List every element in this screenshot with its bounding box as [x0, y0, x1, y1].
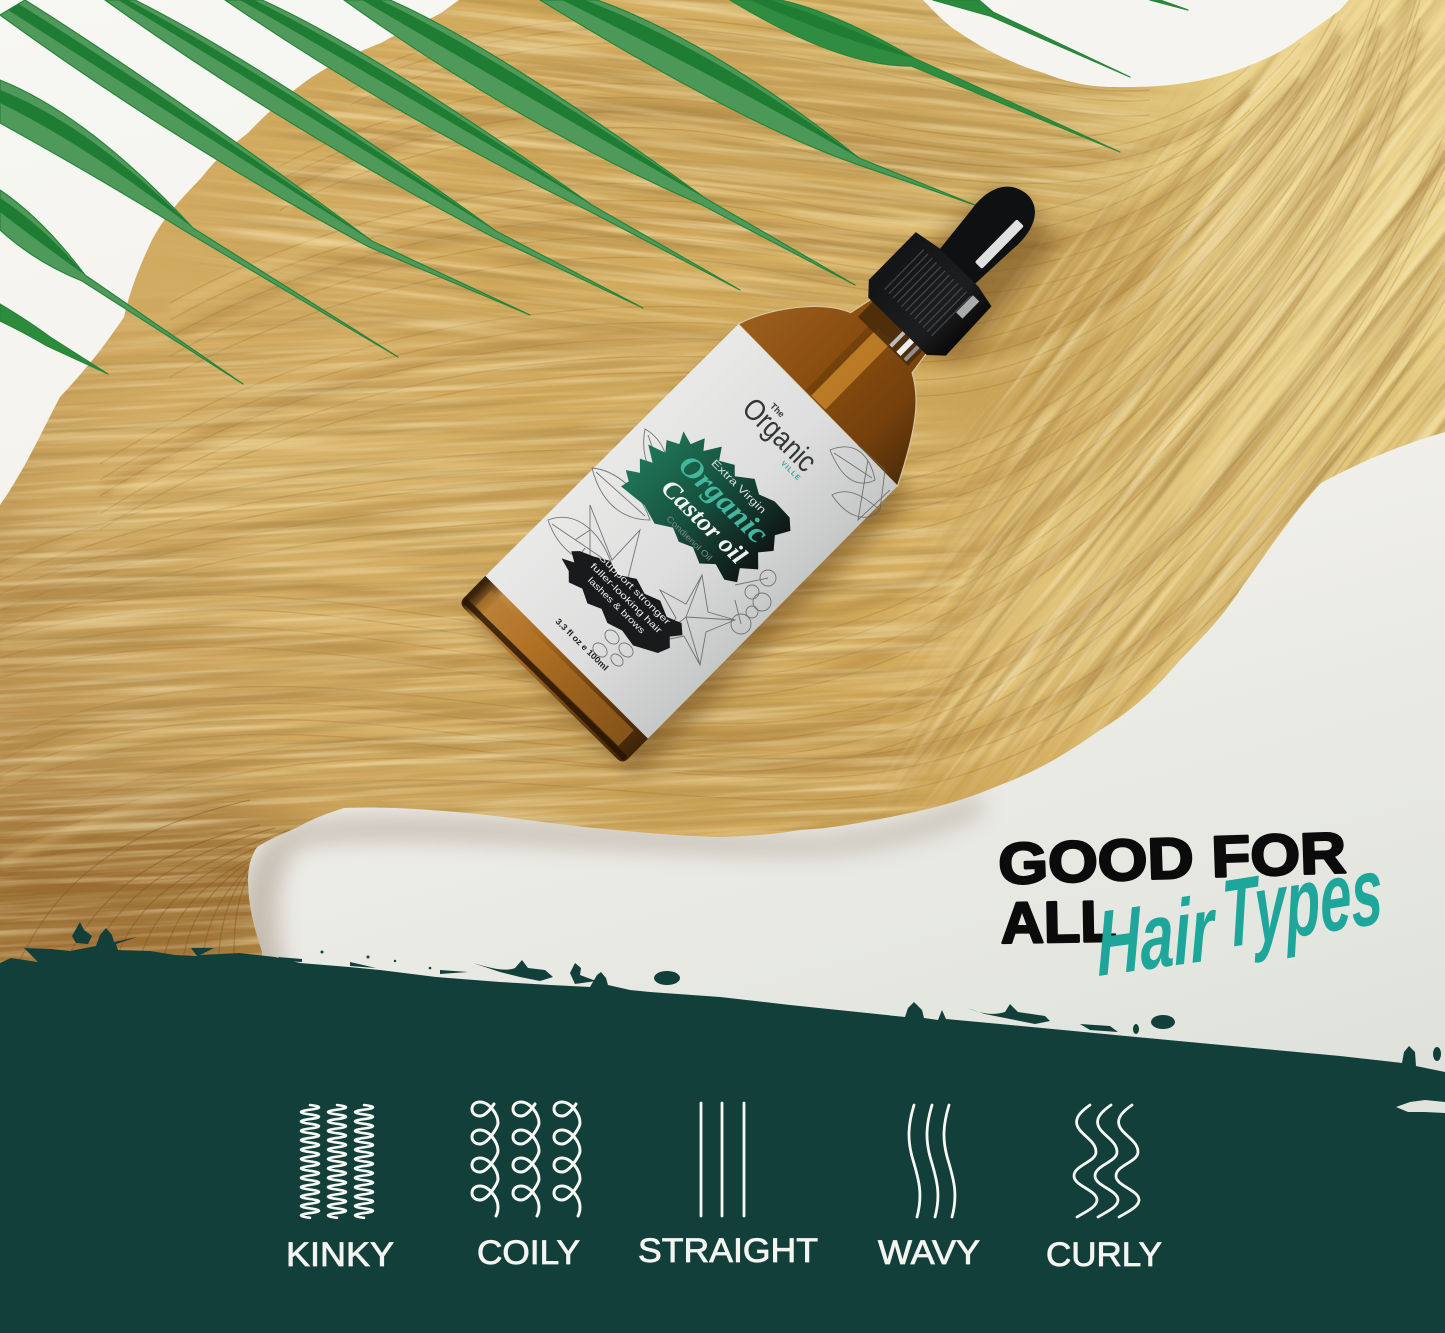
- leaf 8: [540, 0, 975, 205]
- label: kinky: KINKY: [286, 1236, 394, 1274]
- product title text: Condienol Oil: [664, 514, 714, 563]
- band torn edge and fill: [0, 928, 1445, 1333]
- label text and brushes: [512, 359, 851, 699]
- leaf 3: [0, 80, 398, 357]
- dark green band: [0, 922, 1445, 1333]
- logo: The: [768, 401, 787, 419]
- heading: good for all hair types: [997, 820, 1385, 996]
- product title text: Castor oil: [656, 475, 752, 570]
- light brush streak: [1396, 1100, 1445, 1113]
- ink splatters: [72, 922, 1441, 1061]
- leaf 1: [0, 304, 108, 374]
- leaf 9: [730, 0, 1120, 152]
- dropper bulb: [929, 173, 1048, 293]
- label: straight: STRAIGHT: [638, 1232, 818, 1270]
- label: coily: COILY: [477, 1234, 580, 1272]
- benefit text: fuller-looking hair: [588, 561, 664, 635]
- hair tonal shading: [0, 0, 1445, 995]
- benefit text: lashes & brows: [586, 575, 647, 636]
- logo: Organic: [736, 392, 823, 478]
- leaf 5: [105, 0, 643, 308]
- icon: straight: [701, 1103, 744, 1216]
- glass body: [736, 242, 981, 486]
- bottle base: [459, 573, 652, 764]
- bottle shadow: [472, 131, 1113, 778]
- green brush: [612, 409, 802, 598]
- hair type icons: [301, 1102, 1139, 1218]
- label: [428, 258, 1010, 839]
- heading script text: [1095, 837, 1385, 996]
- heading black text: [997, 820, 1347, 956]
- palm leaves: [0, 0, 1188, 384]
- dropper cap: [860, 229, 996, 365]
- leaf 6: [225, 0, 740, 290]
- hair drop shadow: [238, 795, 985, 985]
- hair fine texture: [0, 0, 1445, 1063]
- benefit text: Support stronger: [597, 552, 672, 627]
- label botanical sketches: [548, 429, 890, 668]
- volume: 3.3 fl oz e 100ml: [554, 616, 611, 673]
- icon: curly: [1074, 1105, 1139, 1217]
- icon: coily: [472, 1102, 580, 1216]
- hair type labels: [286, 1232, 1162, 1274]
- bottle: [417, 70, 1194, 851]
- heading script text: Hair: [1095, 875, 1219, 996]
- label: curly: CURLY: [1046, 1236, 1162, 1274]
- icon: kinky: [301, 1105, 373, 1218]
- leaf 10: [933, 0, 1130, 77]
- product title text: Extra Virgin: [709, 457, 768, 516]
- hair tonal bands: [0, 0, 1445, 864]
- leaf 2: [0, 190, 243, 384]
- hair strands dark: [0, 0, 1445, 880]
- label: wavy: WAVY: [878, 1234, 980, 1272]
- heading black text: GOOD FOR: [997, 820, 1347, 897]
- bottom-left loose strands: [20, 800, 290, 960]
- leaf 4: [0, 0, 530, 315]
- benefit text: [580, 552, 672, 644]
- product title text: Organic: [672, 448, 775, 550]
- logo: VILLE: [779, 460, 802, 483]
- heading black text: ALL: [1000, 889, 1117, 956]
- product title text: [644, 442, 781, 579]
- leaf 11: [1150, 0, 1188, 10]
- icon: wavy: [909, 1105, 955, 1217]
- hair: [0, 0, 1445, 1063]
- leaf 7: [344, 0, 855, 285]
- black brush: [552, 531, 689, 666]
